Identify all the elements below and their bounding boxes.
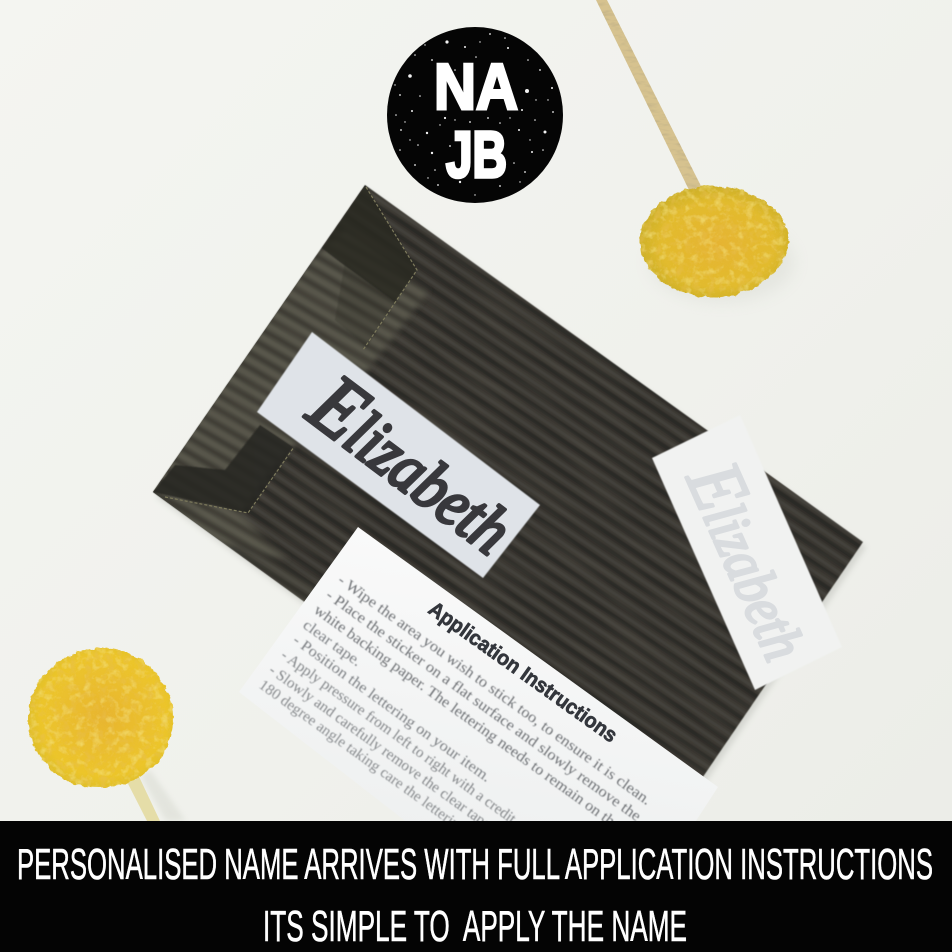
flower stem — [122, 766, 160, 821]
card instructions text: - Slowly and carefully remove the clear tape at a — [266, 661, 515, 848]
card instructions text: 180 degree angle taking care the lettering stays — [256, 676, 497, 857]
flower: bottom left — [28, 648, 186, 821]
logo badge — [387, 27, 563, 203]
card instructions text: white backing paper. The lettering needs to remain on the — [311, 601, 624, 834]
flower: top right — [596, 0, 794, 302]
name sticker on envelope — [257, 332, 540, 578]
surface wear — [270, 213, 834, 773]
card instructions text: clear tape. — [300, 616, 365, 670]
card instructions text: - Wipe the area you wish to stick too, to ensure it is clean. — [335, 571, 654, 809]
white vinyl name sticker — [652, 415, 842, 690]
card instructions text — [256, 571, 654, 857]
top flap — [322, 185, 417, 302]
flower stem — [596, 0, 702, 194]
faint lettering: Elizabeth — [670, 449, 833, 671]
card instructions text: - Position the lettering on your item. — [290, 631, 494, 786]
card instructions text: - Place the sticker on a flat surface and slowly remove the — [323, 586, 644, 825]
envelope — [152, 184, 866, 780]
caption bar — [0, 821, 952, 952]
name lettering: Elizabeth — [291, 354, 536, 572]
logo letters NA: NA — [434, 50, 518, 123]
flower head — [28, 648, 173, 788]
logo letters JB: JB — [446, 118, 507, 191]
stitching — [363, 187, 417, 350]
card heading: Application Instructions — [424, 597, 621, 747]
application instructions card — [239, 527, 718, 857]
bottom flap — [153, 425, 293, 513]
card instructions text: - Apply pressure from left to right with a credit card — [278, 646, 544, 845]
logo speckles — [394, 33, 554, 196]
flower head — [640, 186, 788, 297]
